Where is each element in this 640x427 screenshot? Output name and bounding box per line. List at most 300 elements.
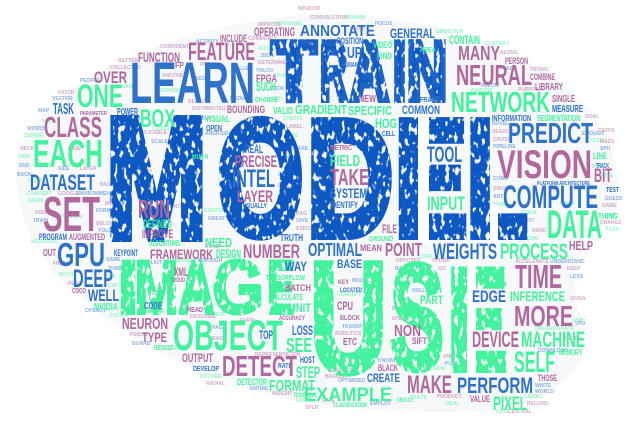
word cloud: tiny filler words: PASS <box>100 182 114 188</box>
word cloud: tiny filler words: ENOUGH <box>582 131 604 137</box>
words: green: MACHINE <box>521 327 585 352</box>
words: green: SUCH <box>256 78 276 94</box>
word cloud: tiny filler words: CENTRAL <box>508 409 532 415</box>
word: MODEL: O <box>217 86 304 270</box>
word cloud: tiny filler words: GOAL <box>585 114 599 120</box>
word cloud: tiny filler words: DATE <box>322 398 336 404</box>
words: medium blue: PERFORM <box>457 373 533 398</box>
words: medium blue: SYSTEM <box>330 185 367 201</box>
words: mauve: COMBINE <box>530 72 555 82</box>
words: mauve <box>43 25 612 404</box>
word cloud: tiny filler words: FAMILY <box>115 218 134 224</box>
word cloud: tiny filler words: OPPOSED <box>396 258 421 264</box>
word cloud: tiny filler words: ANDROID <box>205 131 229 137</box>
words: green: SELF <box>514 346 555 379</box>
words: mauve: THOSE <box>538 373 557 383</box>
word cloud: tiny filler words: REASON <box>188 99 210 105</box>
word cloud: tiny filler words: RATIO <box>565 336 580 342</box>
words: mauve: LAYER <box>237 187 273 206</box>
word cloud: tiny filler words: HEAT <box>212 312 225 318</box>
word cloud: tiny filler words: KNOWN <box>378 358 398 364</box>
words: mauve: RUN <box>138 194 170 224</box>
word cloud: tiny filler words: KEEP <box>567 266 581 272</box>
word cloud: tiny filler words: HARD <box>532 228 547 234</box>
words: medium blue: TOP <box>259 328 273 342</box>
word cloud: tiny filler words: GIVE <box>296 218 309 224</box>
words: green: CONTAIN <box>449 33 480 47</box>
word cloud: tiny filler words: BETWEEN <box>222 309 247 315</box>
word cloud: tiny filler words: VGA <box>254 218 265 224</box>
words: medium blue: HUMAN <box>342 62 358 69</box>
word cloud: tiny filler words: TRACK <box>410 395 428 401</box>
words: green: NEED <box>205 235 232 250</box>
word cloud: tiny filler words: SPLIT <box>305 405 319 411</box>
words: mauve: SINGLE <box>552 94 575 105</box>
word cloud: tiny filler words: TASK <box>606 227 620 233</box>
words: medium blue: KEYPOINT <box>114 248 138 258</box>
word cloud: tiny filler words: COMPARE <box>283 146 309 152</box>
words: mauve: SIFT <box>412 336 427 346</box>
word cloud: tiny filler words: CAFFE <box>598 128 615 134</box>
word cloud: tiny filler words: YOC <box>42 119 53 125</box>
word cloud: tiny filler words: PRE <box>200 62 211 68</box>
word cloud: tiny filler words: SYNTAX <box>487 282 508 288</box>
word cloud: tiny filler words: HIGH <box>18 154 31 160</box>
word cloud: tiny filler words: RAND <box>205 244 220 250</box>
words: green: STEP <box>296 363 320 382</box>
words: medium blue: INFORMATION <box>492 114 531 123</box>
word cloud: tiny filler words: DIFFERENTIATE <box>535 326 575 332</box>
word cloud: tiny filler words: ALONG <box>500 50 518 56</box>
words: mauve: NEURON <box>122 316 168 333</box>
word cloud: tiny filler words: RADIAL <box>206 381 225 387</box>
words: medium blue: RATE <box>278 363 292 370</box>
word cloud: tiny filler words: CLASSIFY <box>485 41 510 47</box>
words: green: MEMORY <box>559 348 582 357</box>
words: green: BOX <box>140 105 175 133</box>
word cloud: tiny filler words: STARTS <box>283 116 303 122</box>
words: mauve: POINT <box>385 240 422 260</box>
words: medium blue: LOSS <box>292 322 313 338</box>
words: mauve: BLACK <box>378 363 398 373</box>
word cloud: tiny filler words: TEMP <box>493 202 508 208</box>
words: mauve: OUTPUT <box>182 351 213 365</box>
word cloud: tiny filler words: YOLOV <box>256 68 274 74</box>
word cloud: tiny filler words: LOCAL <box>525 394 542 400</box>
word cloud: tiny filler words: FORM <box>240 318 255 324</box>
words: medium blue: PREDICT <box>508 118 593 150</box>
words: green: GROUND <box>369 236 393 243</box>
words: medium blue: WELL <box>88 286 119 305</box>
word cloud: tiny filler words: PROVIDE <box>158 88 181 94</box>
word cloud: tiny filler words: SIGNAL <box>168 346 187 352</box>
word cloud: tiny filler words: PI <box>420 154 425 160</box>
words: green: OBJECT <box>173 312 283 360</box>
word cloud: tiny filler words: LESS <box>590 138 604 144</box>
word cloud: tiny filler words: PLAY <box>445 361 459 367</box>
words: medium blue: LEARN <box>130 51 255 116</box>
words: mauve: NEW <box>359 94 376 105</box>
words: medium blue: TRUTH <box>280 233 303 244</box>
word cloud: tiny filler words: IO <box>420 179 425 185</box>
word cloud: tiny filler words: ACCELERATE <box>515 259 549 265</box>
words: mauve: TAKE <box>330 164 369 190</box>
words: medium blue: CODE <box>144 301 162 312</box>
word cloud: tiny filler words: JSON <box>260 53 274 59</box>
word: USE: U <box>310 230 388 406</box>
word: IMAGE: A <box>178 246 215 330</box>
words: mauve: HEAD <box>187 307 203 314</box>
words: green: ONE <box>77 78 123 114</box>
word cloud: tiny filler words: DOMAIN <box>345 15 366 21</box>
words: mauve: METRIC <box>330 145 352 152</box>
words: medium blue: DEEP <box>73 265 113 293</box>
word: TRAIN: I <box>393 24 406 118</box>
word cloud: tiny filler words: ACCURATE <box>30 239 58 245</box>
words: mauve: BLOCK <box>340 315 360 322</box>
word: IMAGE: E <box>267 246 294 330</box>
word cloud: tiny filler words: GAIN <box>68 146 81 152</box>
word cloud: tiny filler words: VARY <box>572 318 586 324</box>
words: mauve: SET <box>43 188 100 242</box>
words: mauve: XML <box>174 265 188 279</box>
word cloud: tiny filler words: GOOD <box>150 291 166 297</box>
words: green: EXAMPLE <box>304 385 392 406</box>
words: medium blue: COMMON <box>402 103 440 117</box>
word cloud: tiny filler words: ENABLE <box>28 198 49 204</box>
word cloud: tiny filler words: PRODUCT <box>437 394 462 400</box>
word cloud: tiny filler words: ACTIVITY <box>196 39 219 45</box>
words: green: INFERENCE <box>510 288 565 304</box>
word cloud: tiny filler words: SEARCH <box>492 129 514 135</box>
word cloud: tiny filler words: CONFIDENT <box>160 44 189 50</box>
words: mauve: KEY <box>338 280 349 286</box>
words: mauve: TYPE <box>142 329 167 345</box>
words: medium blue: BASE <box>337 257 362 271</box>
stencil gap in USE <box>467 258 476 378</box>
words: green: DEFINED <box>143 217 172 231</box>
words: green: UNIT <box>289 301 312 315</box>
word cloud: tiny filler words: PEAK <box>68 281 82 287</box>
words: medium blue: OPEN <box>206 124 222 133</box>
word cloud: tiny filler words: DISK <box>35 210 47 216</box>
words: medium blue: CELL <box>382 131 396 138</box>
word cloud: tiny filler words: BASIC <box>212 336 228 342</box>
word cloud: tiny filler words: RECORD <box>527 401 549 407</box>
word cloud: tiny filler words: INSIGHT <box>272 391 292 397</box>
word cloud: tiny filler words: YPORK <box>432 258 450 264</box>
word cloud: tiny filler words: PIPELINE <box>493 144 516 150</box>
word cloud: tiny filler words: BOX <box>592 164 604 170</box>
word cloud: tiny filler words: FACE <box>284 154 298 160</box>
words: medium blue: IDENTIFY <box>330 200 358 210</box>
words: medium blue: HOST <box>300 355 315 365</box>
word cloud: tiny filler words: BELOW <box>96 221 115 227</box>
word cloud: tiny filler words: ALLOW <box>481 83 500 89</box>
word cloud: tiny filler words: WORLD <box>535 389 554 395</box>
word cloud: tiny filler words: ISH <box>250 121 259 127</box>
words: mauve: FPGA <box>256 73 277 85</box>
word cloud: tiny filler words: BAG <box>296 211 307 217</box>
word cloud: tiny filler words: TRAIN <box>33 218 49 224</box>
word cloud: tiny filler words: PLUS <box>558 106 572 112</box>
word cloud: tiny filler words: TRYING <box>530 67 549 73</box>
words: green: NVIDIA <box>94 302 118 313</box>
words: mauve: IMPROVE <box>142 227 173 241</box>
words: green: CALCULATE <box>270 293 303 302</box>
word cloud: tiny filler words: COLLECTED <box>110 65 141 71</box>
words: green: LINE <box>593 151 607 161</box>
words: green: INPUT <box>427 194 465 215</box>
word cloud: tiny filler words: WINDOW <box>470 88 492 94</box>
word cloud: tiny filler words: MEDIA <box>230 96 246 102</box>
word cloud: tiny filler words: COMMONLY <box>248 36 278 42</box>
word cloud: tiny filler words: WHITE <box>535 383 552 389</box>
word cloud: tiny filler words: PIXELS <box>130 332 148 338</box>
word cloud: tiny filler words: DOWNLOAD <box>538 348 568 354</box>
words: green: FIELD <box>330 153 360 170</box>
word cloud: tiny filler words: NEEDS <box>192 76 210 82</box>
words: mauve: CLASS <box>44 112 102 144</box>
word: USE <box>310 230 508 406</box>
word cloud: tiny filler words: LEARNED <box>328 368 353 374</box>
word cloud: tiny filler words: DESCRIBE <box>190 314 217 320</box>
words: green: PROCESS <box>500 239 568 264</box>
word cloud: tiny filler words: ENVIRONMENT <box>76 191 113 197</box>
word cloud: tiny filler words: CALLED <box>232 66 253 72</box>
word cloud: tiny filler words: TWO <box>190 264 202 270</box>
words: medium blue: TEST <box>606 187 620 194</box>
words: mauve: TIME <box>515 258 562 295</box>
word cloud: tiny filler words: HULL <box>412 288 425 294</box>
words: green: RESULT <box>154 345 173 352</box>
word cloud: tiny filler words: NECK <box>20 146 35 152</box>
words: green: SEGMENTATION <box>537 114 580 123</box>
words: green: ALGORITHMS <box>149 239 180 248</box>
words: medium blue: TOOL <box>427 142 462 167</box>
words: medium blue: TRACK <box>596 163 609 170</box>
words: mauve: NUMBER <box>243 242 300 263</box>
word: IMAGE: G <box>212 246 264 330</box>
word: IMAGE <box>117 246 294 330</box>
words: mauve: OVER <box>94 68 127 87</box>
word cloud: tiny filler words: CONVERT <box>27 191 51 197</box>
words: mauve: AUGMENTED <box>69 232 105 242</box>
word cloud: tiny filler words: MS <box>108 274 116 280</box>
words: mauve: OUT <box>43 248 56 259</box>
words: mauve: INCLUDE <box>220 33 247 45</box>
words: medium blue: POSITION <box>337 36 363 46</box>
word cloud: tiny filler words: COLOR <box>110 313 128 319</box>
word cloud: tiny filler words: GREAT <box>208 216 225 222</box>
word cloud: tiny filler words: ENTIRE <box>250 386 269 392</box>
words: medium blue: MEASURE <box>552 104 583 115</box>
word cloud: tiny filler words: FIT <box>527 218 534 224</box>
words: medium blue: USUALLY <box>243 203 267 210</box>
words: mauve: BIT <box>594 166 612 187</box>
word: TRAIN: T <box>272 24 316 118</box>
words: mauve: PARAMETER <box>80 111 107 117</box>
word cloud: tiny filler words: LAYER <box>80 166 97 172</box>
word cloud: tiny filler words: AUTOML <box>258 46 279 52</box>
words: green: THING <box>598 212 618 221</box>
word cloud: tiny filler words: THROUGH <box>197 258 223 264</box>
words: green: DEPLOY <box>397 398 413 404</box>
word cloud: tiny filler words: VPU <box>575 321 586 327</box>
words: mauve: VALUE <box>470 394 490 404</box>
word cloud: tiny filler words: HARDWARE <box>273 21 303 27</box>
words: mauve: MEAN <box>360 243 382 253</box>
words: mauve: FRAMEWORK <box>150 246 213 262</box>
word cloud: tiny filler words: NOVEL <box>492 121 509 127</box>
word cloud: tiny filler words: OPTIMIZED <box>338 378 366 384</box>
word cloud: tiny filler words: PRE <box>288 133 299 139</box>
word cloud: tiny filler words: LABEL <box>286 124 303 130</box>
words: green: GRADIENT <box>295 102 347 117</box>
word cloud: tiny filler words: BETTER <box>118 58 138 64</box>
words: mauve: LIBRARY <box>535 82 563 93</box>
word cloud: tiny filler words: MEDIUM <box>253 132 273 138</box>
word cloud: tiny filler words: SPU <box>600 146 611 152</box>
word cloud: tiny filler words: CORE <box>418 254 433 260</box>
word: IMAGE: M <box>134 246 178 330</box>
word cloud: tiny filler words: SPEED <box>392 316 409 322</box>
word cloud: tiny filler words: BOTH <box>59 272 74 278</box>
word cloud: tiny filler words: SINGLE <box>493 186 512 192</box>
words: mauve: VISION <box>497 143 592 187</box>
word cloud: tiny filler words: DATE <box>496 409 510 415</box>
words: mauve: FUNCTION <box>138 49 180 65</box>
word cloud: tiny filler words: NAME <box>602 203 617 209</box>
word cloud: tiny filler words: END <box>19 163 30 169</box>
word cloud: tiny filler words: CHANGE <box>600 220 622 226</box>
words: medium blue: LOCATED <box>340 288 363 294</box>
word cloud: tiny filler words: YOUR <box>273 73 288 79</box>
words: medium blue: INTEL <box>232 165 275 193</box>
words: medium blue: DEVELOP <box>193 366 219 373</box>
words: mauve: HELP <box>569 238 593 253</box>
word cloud: tiny filler words: SEVERAL <box>390 40 414 46</box>
word cloud: tiny filler words: PURPOSE <box>518 87 543 93</box>
words: green: FORMAT <box>269 378 315 395</box>
word cloud: tiny filler words: ROBOTICS <box>335 331 362 337</box>
word: IMAGE: I <box>117 246 139 330</box>
words: mauve: NEURAL <box>456 60 532 92</box>
word cloud: tiny filler words: ONE <box>123 84 134 90</box>
word cloud: tiny filler words: CONSTANT <box>152 126 179 132</box>
word cloud: tiny filler words: GIVEN <box>570 296 586 302</box>
words: mauve: COCO <box>72 288 86 295</box>
word cloud: tiny filler words: IMPORTANT <box>182 116 211 122</box>
word cloud: tiny filler words: CAT <box>108 283 118 289</box>
word cloud: tiny filler words: FLOW <box>350 26 365 32</box>
words: medium blue: OPTIMAL <box>308 240 362 260</box>
words: medium blue: ANNOTATE <box>300 23 375 40</box>
word cloud: tiny filler words: REPRESENTATION <box>255 352 301 358</box>
word cloud: tiny filler words: CAR <box>605 213 616 219</box>
words: medium blue: REAL <box>245 142 263 156</box>
word cloud: tiny filler words: GUESS <box>605 196 623 202</box>
stencil gaps in MODEL <box>418 113 498 243</box>
word cloud: tiny filler words: IMPROVE <box>258 22 282 28</box>
word cloud: tiny filler words: GO <box>438 266 446 272</box>
words: green: PART <box>420 293 443 307</box>
words: medium blue: UP <box>347 45 362 62</box>
words: medium blue: EDGE <box>472 287 506 306</box>
word cloud: tiny filler words: MODEL <box>352 278 370 284</box>
word cloud: tiny filler words: MAP <box>38 108 50 114</box>
word: USE: E <box>447 238 508 401</box>
word cloud: tiny filler words: LESS <box>570 274 584 280</box>
word cloud: tiny filler words: ANN <box>443 354 454 360</box>
words: green: TECHNIQUE <box>293 393 317 399</box>
words: medium blue: TASK <box>53 101 74 118</box>
word cloud: tiny filler words: SIDE <box>58 166 70 172</box>
word cloud: tiny filler words: CROSS <box>493 137 511 143</box>
word cloud: tiny filler words: CUSTOM <box>204 208 226 214</box>
word: MODEL: L <box>466 86 528 272</box>
words: green: MUCH <box>192 154 208 161</box>
word cloud: tiny filler words: FREE <box>53 261 67 267</box>
word cloud: tiny filler words: CONTEXT <box>28 178 52 184</box>
words: medium blue: GENERAL <box>390 25 435 41</box>
word cloud: tiny filler words: OPENCV <box>85 308 107 314</box>
words: green: VIDEO <box>373 40 392 50</box>
words: mauve: ACCURACY <box>279 316 305 322</box>
word cloud: tiny filler words: APPLICABLE <box>135 130 168 136</box>
word cloud: tiny filler words: NOW <box>433 366 446 372</box>
word: TRAIN: N <box>407 24 447 118</box>
word cloud: tiny filler words: RATE <box>600 173 614 179</box>
word cloud: tiny filler words: COMB <box>493 176 509 182</box>
word cloud: tiny filler words: BUILD <box>278 183 294 189</box>
word cloud: tiny filler words: VECTOR <box>52 96 73 102</box>
word cloud: tiny filler words: DETERMINE <box>258 60 288 66</box>
word cloud: tiny filler words: FOCUS <box>296 398 314 404</box>
words: mauve: CLOUD <box>171 278 185 284</box>
words: medium blue: CREATE <box>367 371 400 385</box>
word cloud: tiny filler words: SAME <box>106 257 121 263</box>
word cloud: tiny filler words: DOCKER <box>200 374 222 380</box>
word cloud: tiny filler words: MULTIPLE <box>105 201 130 207</box>
word cloud: tiny filler words: ENDING <box>172 258 192 264</box>
word: MODEL: D <box>306 86 394 272</box>
word cloud: tiny filler words: API <box>420 166 429 172</box>
words: green: NETWORK <box>451 87 550 119</box>
word cloud: tiny filler words: NAME <box>560 201 575 207</box>
word cloud: tiny filler words: FORM <box>96 208 111 214</box>
words: green: SEE <box>286 335 312 357</box>
words: medium blue: GPU <box>57 236 105 273</box>
words: medium blue: PROGRAM <box>39 232 67 242</box>
word cloud: tiny filler words: REAL <box>446 401 460 407</box>
words: medium blue: DATASET <box>30 170 95 195</box>
word cloud: tiny filler words: WINDOW <box>298 6 320 12</box>
word cloud: tiny filler words: YOLO <box>98 228 112 234</box>
words: mauve: ETC <box>343 337 357 348</box>
words: medium blue: POWER <box>117 107 138 118</box>
words: mauve: BATCH <box>285 283 311 293</box>
word cloud: tiny filler words: DURING <box>24 133 44 139</box>
word cloud: tiny filler words: DIRECTION <box>436 29 464 35</box>
word: MODEL: M <box>105 81 208 275</box>
word cloud: tiny filler words: UNDERSTAND <box>550 259 585 265</box>
words: green: CLASSIFICATION <box>333 403 367 409</box>
word cloud: tiny filler words: PATCH <box>58 90 75 96</box>
words: mauve: FP <box>175 61 185 70</box>
word cloud: tiny filler words: ART <box>493 194 503 200</box>
word cloud: tiny filler words: THREE <box>108 266 126 272</box>
